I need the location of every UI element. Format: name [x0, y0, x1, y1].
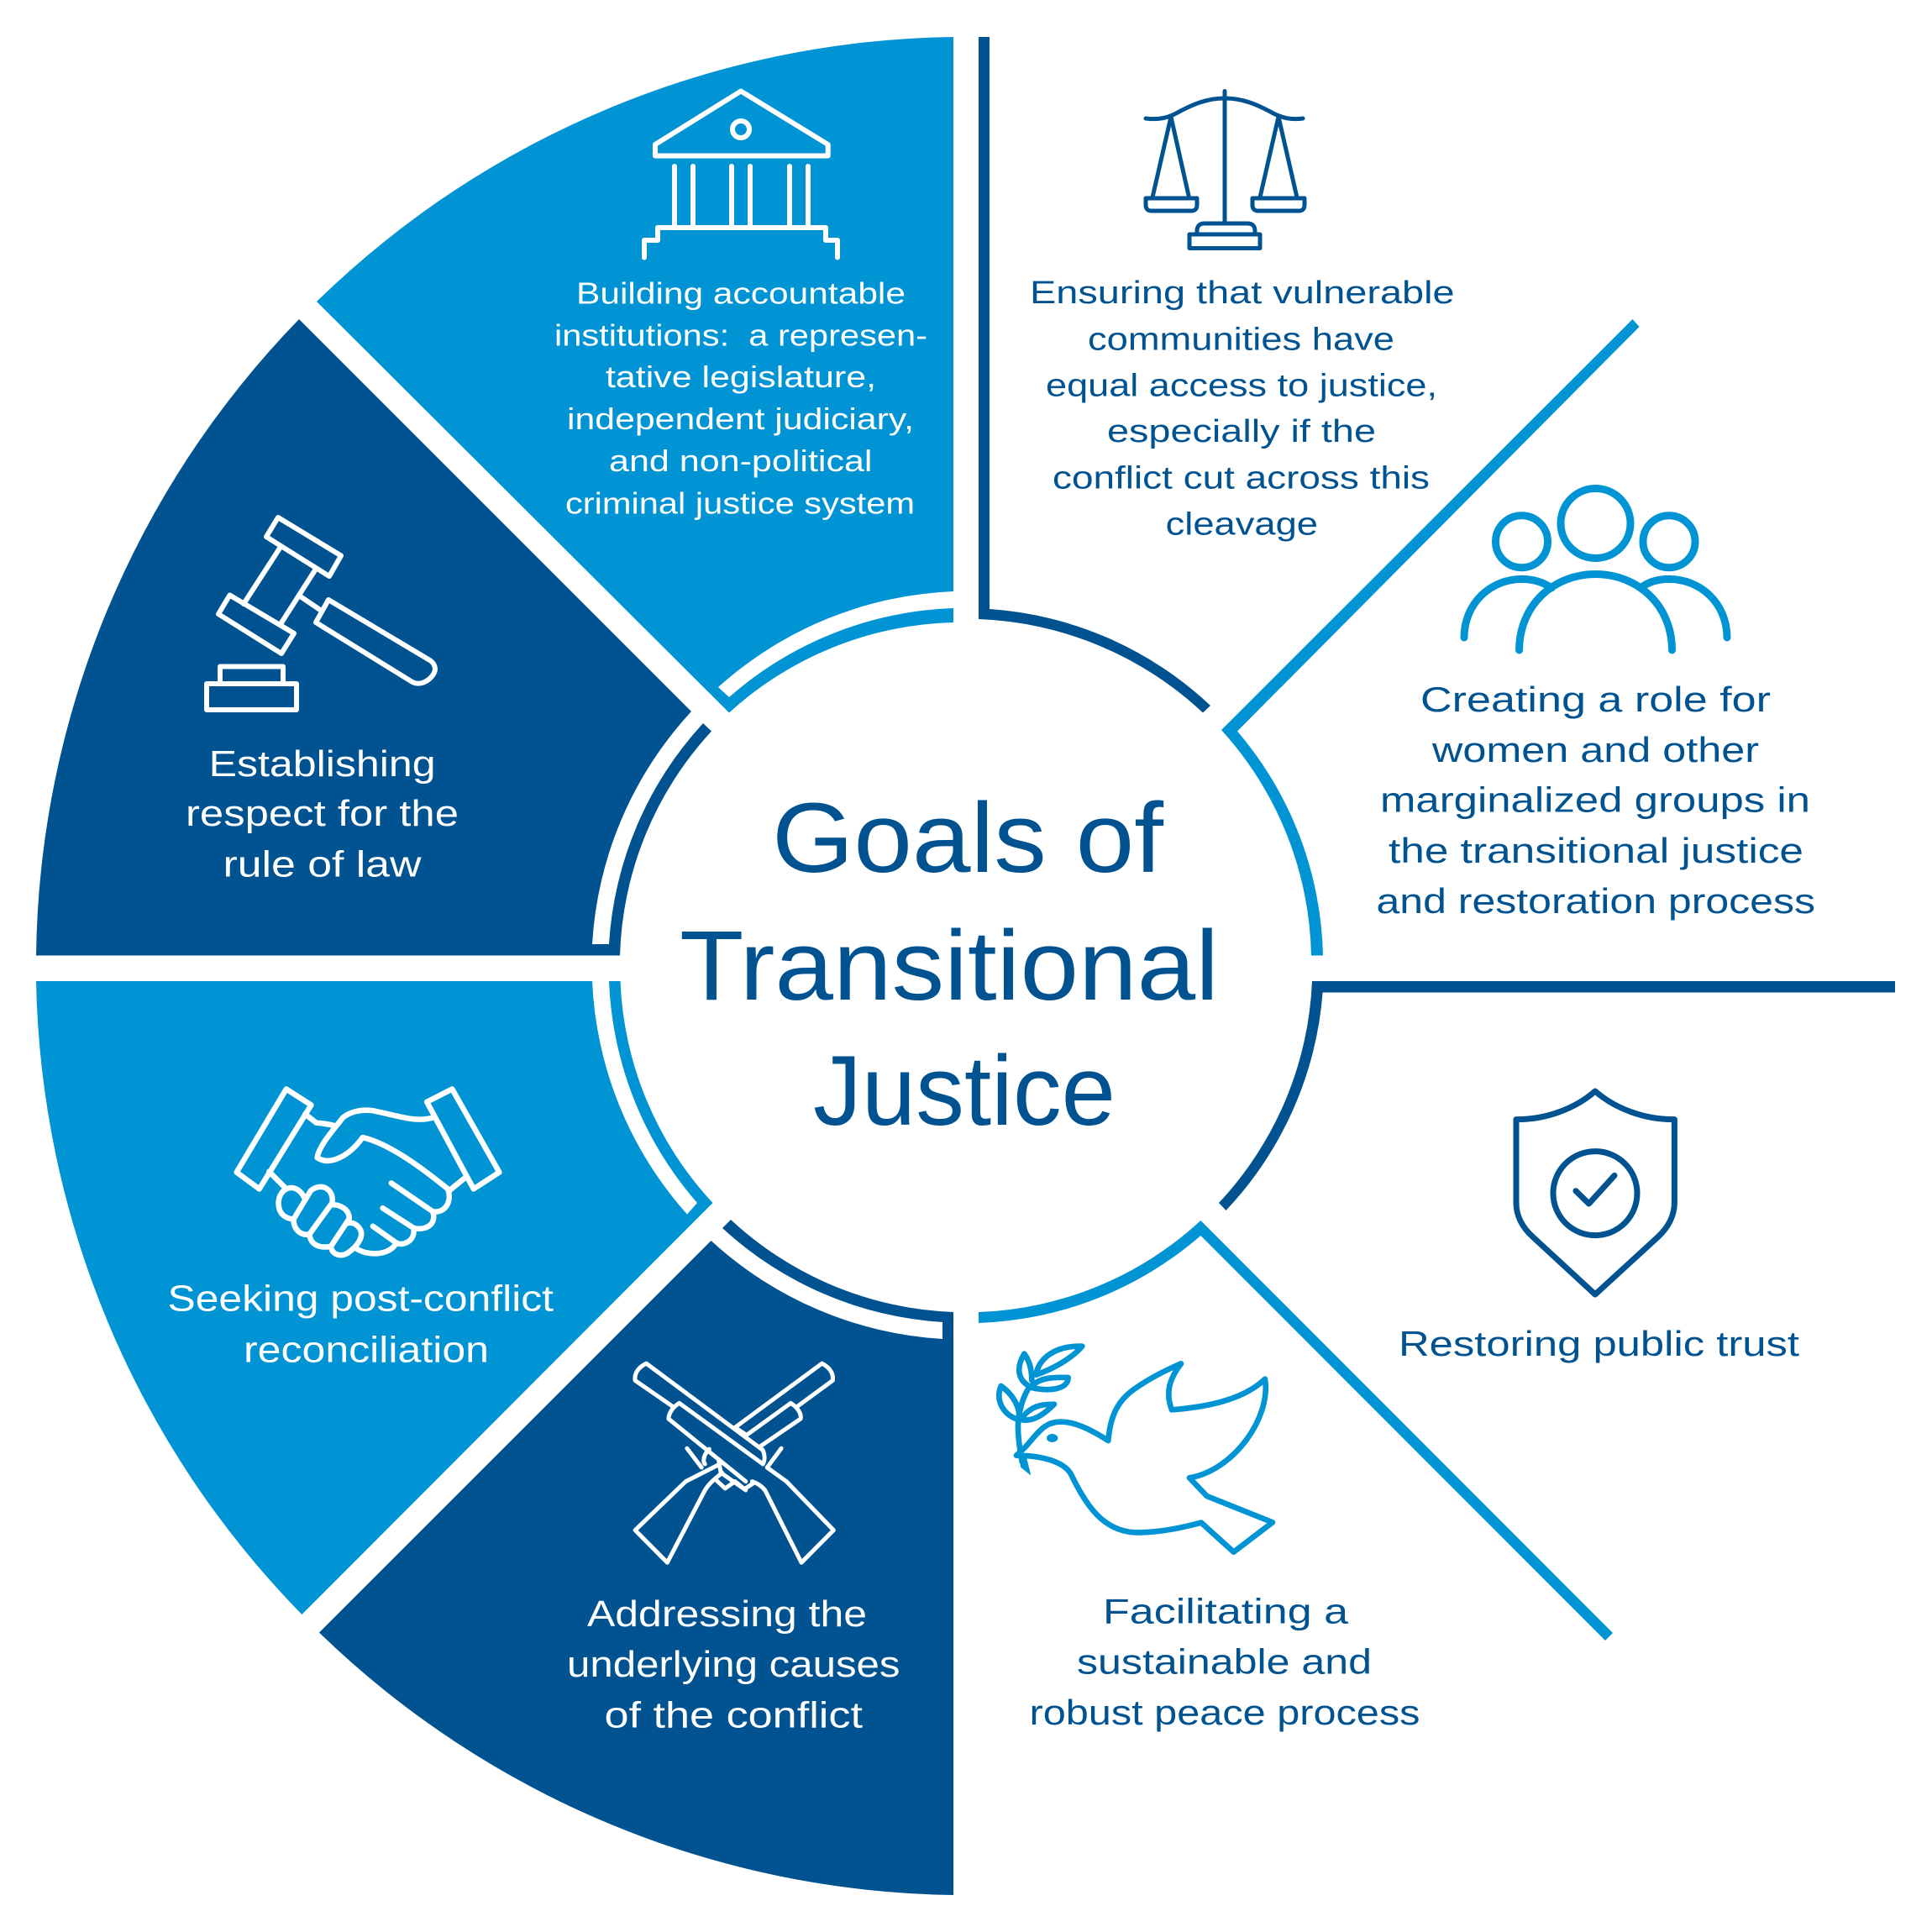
panel shape — [36, 981, 712, 1614]
block: women and marginalized groups — [1376, 489, 1815, 921]
text: equal access: communities have — [1088, 323, 1394, 358]
text: equal access: conflict cut across this — [1053, 461, 1430, 496]
text: marginalized groups: the transitional justice — [1389, 831, 1803, 870]
panel shape — [319, 1220, 953, 1895]
text: underlying causes: of the conflict — [605, 1695, 863, 1735]
icon: scales of justice — [1146, 91, 1305, 249]
icon: courthouse — [644, 91, 837, 257]
text: marginalized groups: women and other — [1431, 730, 1759, 769]
text: institutions: independent judiciary, — [567, 402, 914, 436]
text: marginalized groups: and restoration process — [1376, 881, 1815, 921]
icon: crossed rifles — [635, 1363, 833, 1562]
panel: rule of law — [36, 319, 711, 956]
text: equal access: especially if the — [1107, 414, 1376, 449]
text: institutions: and non-political — [609, 444, 872, 478]
text: institutions: criminal justice system — [565, 486, 915, 521]
divider: lower right diagonal and arc — [979, 1221, 1613, 1641]
text: rule of law — [186, 743, 459, 885]
text: equal access: Ensuring that vulnerable — [1030, 276, 1455, 311]
title: Transitional — [680, 911, 1219, 1021]
text: marginalized groups — [1376, 680, 1815, 921]
text: rule of law: respect for the — [186, 793, 459, 834]
icon: group of people — [1464, 489, 1727, 650]
panel shape — [36, 319, 711, 956]
panel shape — [317, 37, 953, 712]
block: sustainable peace process — [999, 1347, 1420, 1732]
text: underlying causes — [567, 1593, 900, 1735]
text: marginalized groups: Creating a role for — [1420, 680, 1771, 719]
text: institutions: institutions: a represen- — [554, 318, 927, 352]
text: institutions — [554, 276, 927, 521]
block: equal access to justice — [1030, 91, 1455, 543]
text: reconciliation: Seeking post-conflict — [168, 1278, 554, 1320]
text: rule of law: rule of law — [223, 844, 422, 885]
text: peace process: sustainable and — [1077, 1642, 1372, 1682]
divider: right horizontal line and arc — [1219, 981, 1895, 1210]
panel: underlying causes — [319, 1220, 953, 1895]
text: institutions: Building accountable — [576, 276, 906, 311]
icon: shield with check — [1516, 1091, 1674, 1294]
title — [680, 783, 1219, 1147]
panel: reconciliation — [36, 981, 712, 1614]
panel: building accountable institutions — [317, 37, 953, 712]
divider: upper right diagonal and arc — [1221, 319, 1640, 956]
text: rule of law: Establishing — [209, 743, 436, 785]
divider: top vertical line and arc — [979, 37, 1210, 712]
text: reconciliation — [168, 1278, 554, 1371]
title: Justice — [813, 1036, 1116, 1147]
text: reconciliation: reconciliation — [244, 1330, 489, 1371]
icon: handshake — [237, 1089, 499, 1255]
text: peace process: Facilitating a — [1103, 1591, 1349, 1631]
text: institutions: tative legislature, — [606, 360, 876, 394]
text: equal access: cleavage — [1166, 507, 1318, 543]
icon: gavel — [207, 517, 435, 710]
text: peace process: robust peace process — [1030, 1693, 1420, 1732]
text: public trust: Restoring public trust — [1399, 1324, 1799, 1363]
text: marginalized groups: marginalized groups in — [1380, 780, 1810, 820]
title: Goals of — [772, 783, 1163, 894]
text: underlying causes: Addressing the — [587, 1593, 867, 1635]
text: equal access — [1030, 276, 1455, 543]
text: equal access: equal access to justice, — [1046, 369, 1437, 404]
icon: dove with olive branch — [999, 1347, 1273, 1552]
block: restoring public trust — [1399, 1091, 1799, 1363]
text: peace process — [1030, 1591, 1420, 1732]
text: underlying causes: underlying causes — [567, 1644, 900, 1685]
